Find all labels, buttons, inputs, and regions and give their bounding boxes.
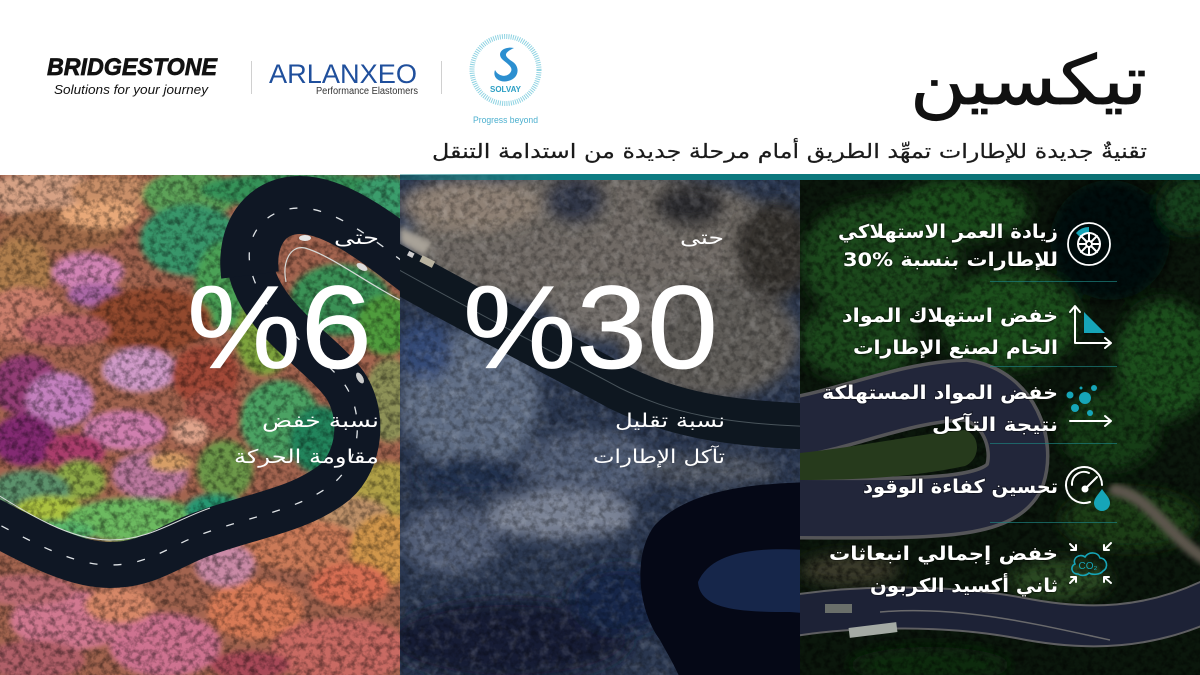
stat: 30 percent tyre wear: تآكل الإطارات [593,444,725,468]
benefit: CO2 emissions: ثاني أكسيد الكربون [870,573,1058,597]
benefit: fuel efficiency: تحسين كفاءة الوقود [863,476,1058,498]
logo: Solvay: SOLVAY [490,85,522,94]
divider [441,61,442,94]
road and dark bend [385,226,830,675]
benefit: fuel efficiency [863,467,1110,511]
benefit: abrasion: خفض المواد المستهلكة [822,382,1058,404]
benefit: abrasion [822,382,1111,436]
stat: 6 percent rolling resistance: %6 [187,262,372,394]
icon: particles [1066,385,1111,426]
panel: snowy forest photo [400,175,800,675]
benefit: tyre life: زيادة العمر الاستهلاكي [838,221,1058,243]
benefit: tyre life: للإطارات بنسبة %30 [843,249,1058,271]
benefit: CO2 emissions [829,543,1111,597]
stat: 6 percent rolling resistance: حتى [334,227,379,249]
stat: 30 percent tyre wear [463,227,725,468]
winding road [0,205,420,565]
stat: 6 percent rolling resistance: نسبة خفض [262,410,379,432]
icon: reduction chart [1070,306,1111,348]
stat: 30 percent tyre wear: نسبة تقليل [615,410,725,432]
logo: Bridgestone [47,54,218,97]
road curves [790,390,1200,640]
separator [990,366,1117,367]
logo: Solvay: Progress beyond [473,115,538,125]
benefit: CO2 emissions: خفض إجمالي انبعاثات [829,543,1058,565]
icon: tyre [1068,223,1110,265]
foliage texture speckle [0,175,400,675]
benefit: raw materials: الخام لصنع الإطارات [853,337,1058,359]
benefit: tyre life [838,221,1110,271]
logo: Bridgestone: BRIDGESTONE [47,54,218,81]
benefit: abrasion: نتيجة التآكل [932,412,1058,436]
stat: 6 percent rolling resistance [187,227,379,468]
subtitle: تقنيةٌ جديدة للإطارات تمهِّد الطريق أمام مرحلة جديدة من استدامة التنقل [432,138,1147,163]
logo: Bridgestone: Solutions for your journey [54,82,210,97]
stat: 30 percent tyre wear: حتى [680,227,724,249]
stat: 30 percent tyre wear: %30 [463,262,718,394]
separator [990,281,1117,282]
teal header strip [400,174,1200,180]
icon: CO2 cloud: CO₂ [1079,561,1098,572]
logo: Arlanxeo: Performance Elastomers [316,86,418,97]
icon: gauge and drop [1066,467,1110,511]
title: تيكسين [910,42,1147,121]
divider [251,61,252,94]
benefit: raw materials: خفض استهلاك المواد [842,305,1058,327]
logo: Solvay [472,36,539,125]
separator [990,443,1117,444]
icon: CO2 cloud [1070,543,1111,583]
stat: 6 percent rolling resistance: مقاومة الحركة [234,446,379,468]
separator [990,522,1117,523]
panel: green forest and road photo [790,175,1200,675]
logo: Arlanxeo: ARLANXEO [269,59,417,89]
panel: autumn forest photo [0,171,425,675]
benefit: raw materials [842,305,1111,359]
